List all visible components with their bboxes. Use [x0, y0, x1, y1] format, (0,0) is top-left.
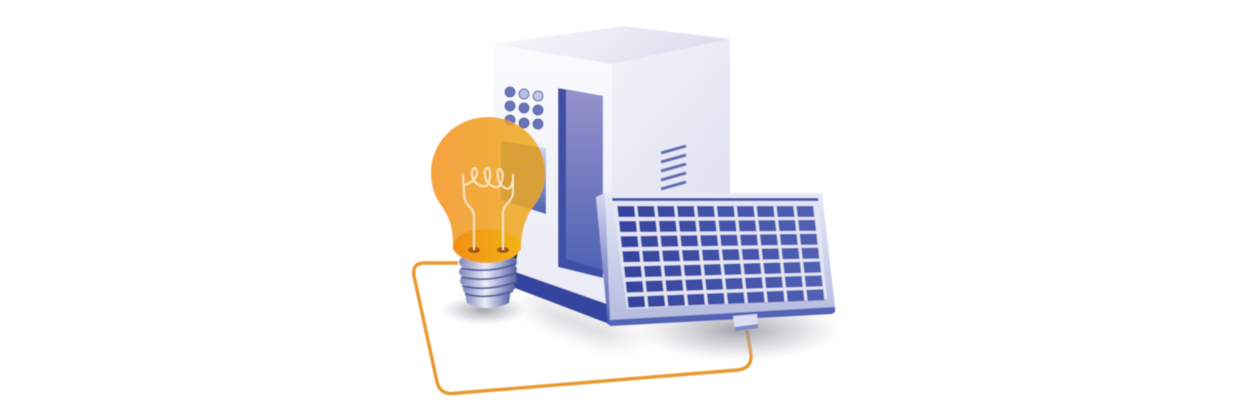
panel inner recess: [612, 198, 827, 309]
reflection of cabinet through glass: [501, 120, 545, 210]
cabinet right side: [612, 39, 730, 260]
cabinet top: [493, 26, 730, 64]
cabinet base: [493, 264, 612, 325]
wire: [414, 263, 751, 394]
screw base: [459, 252, 518, 308]
vent: [661, 146, 686, 189]
glass bottom: [453, 229, 521, 263]
dots: [505, 87, 543, 129]
window: [558, 88, 603, 278]
shadows: [440, 295, 842, 361]
contacts: [468, 247, 480, 253]
filament: [463, 168, 513, 250]
solar panel: [596, 193, 835, 331]
panel frame: [605, 193, 835, 320]
light bulb: [431, 114, 546, 308]
small panel: [501, 141, 546, 214]
panel underside: [608, 305, 835, 326]
solar cells: [617, 206, 824, 308]
panel side: [596, 193, 619, 325]
cabinet: [493, 26, 730, 325]
connector: [733, 314, 758, 331]
illustration: solar panel, cabinet and light bulb: [411, 26, 836, 396]
cabinet front: [493, 44, 612, 310]
glass: [431, 117, 545, 250]
